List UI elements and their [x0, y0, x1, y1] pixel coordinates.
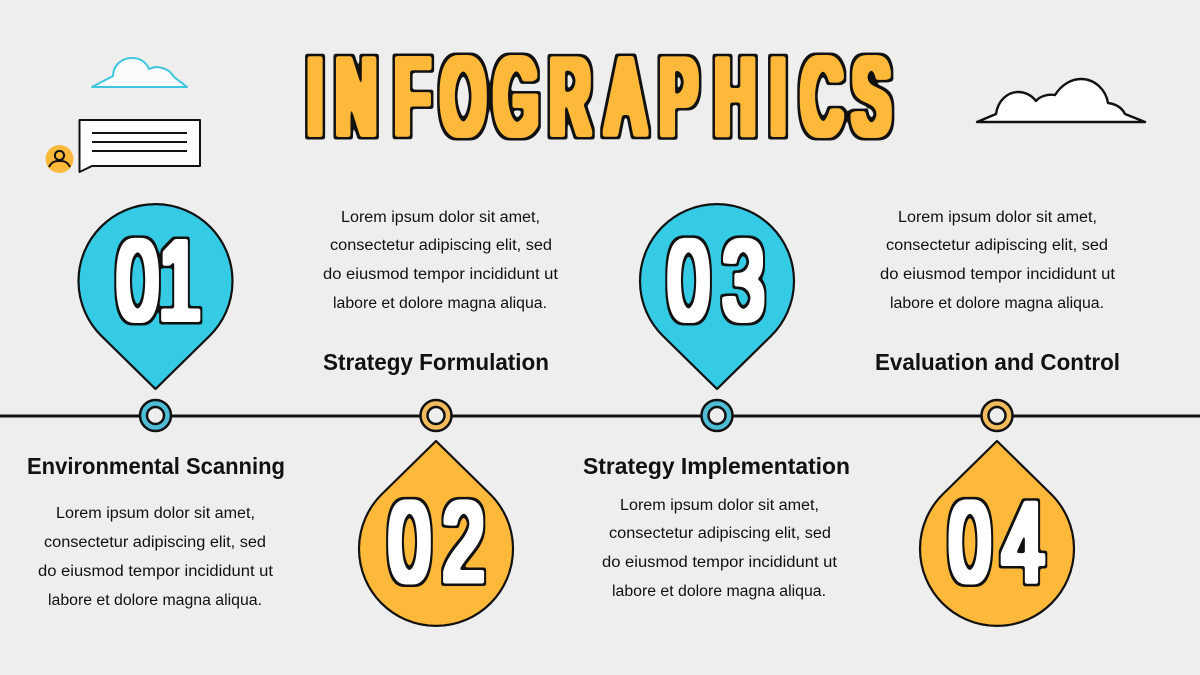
heading: Environmental Scanning: Environmental Scanning	[27, 453, 285, 479]
timeline node 4	[982, 400, 1012, 431]
marker: 04	[920, 441, 1074, 626]
icon: speech bubble with avatar	[46, 120, 200, 173]
text block: step 2: labore et dolore magna aliqua.	[333, 295, 547, 312]
text block: step 2: consectetur adipiscing elit, sed	[330, 237, 552, 254]
heading: Strategy Implementation: Strategy Implementation	[583, 453, 850, 479]
text block: step 3: Lorem ipsum dolor sit amet,	[620, 497, 819, 514]
text block: step 2: do eiusmod tempor incididunt ut	[323, 266, 559, 283]
icon: large white cloud	[977, 79, 1145, 122]
text block: step 3: labore et dolore magna aliqua.	[612, 583, 826, 600]
icon: small blue cloud	[92, 58, 187, 87]
text block: step 3	[602, 497, 838, 600]
text block: step 4	[880, 209, 1116, 312]
timeline node 1	[140, 400, 171, 431]
text block: step 1: consectetur adipiscing elit, sed	[44, 534, 266, 551]
heading: Evaluation and Control: Evaluation and Control	[875, 349, 1120, 375]
text block: step 2: Lorem ipsum dolor sit amet,	[341, 209, 540, 226]
marker: 02	[359, 441, 513, 626]
timeline node 2	[420, 400, 452, 431]
text block: step 4: Lorem ipsum dolor sit amet,	[898, 209, 1097, 226]
text block: step 4: labore et dolore magna aliqua.	[890, 295, 1104, 312]
timeline node 3	[702, 400, 732, 431]
marker: 04: 04	[949, 479, 1044, 606]
marker: 01	[78, 204, 232, 389]
title: INFOGRAPHICS	[308, 37, 889, 158]
text block: step 4: consectetur adipiscing elit, sed	[886, 237, 1108, 254]
icon: avatar	[46, 145, 74, 173]
text block: step 2	[323, 209, 559, 312]
marker: 02: 02	[389, 479, 484, 606]
text block: step 1: labore et dolore magna aliqua.	[48, 592, 262, 609]
text block: step 3: consectetur adipiscing elit, sed	[609, 525, 831, 542]
bubble text lines	[92, 133, 187, 151]
heading: Strategy Formulation: Strategy Formulation	[323, 349, 549, 375]
text block: step 1: Lorem ipsum dolor sit amet,	[56, 505, 255, 522]
marker: 03	[640, 204, 794, 389]
text block: step 4: do eiusmod tempor incididunt ut	[880, 266, 1116, 283]
icon: speech bubble	[80, 120, 200, 172]
text block: step 1	[38, 505, 274, 609]
marker: 01: 01	[117, 218, 201, 344]
timeline axis	[0, 414, 1200, 418]
marker: 03: 03	[668, 218, 764, 344]
text block: step 3: do eiusmod tempor incididunt ut	[602, 554, 838, 571]
text block: step 1: do eiusmod tempor incididunt ut	[38, 563, 274, 580]
